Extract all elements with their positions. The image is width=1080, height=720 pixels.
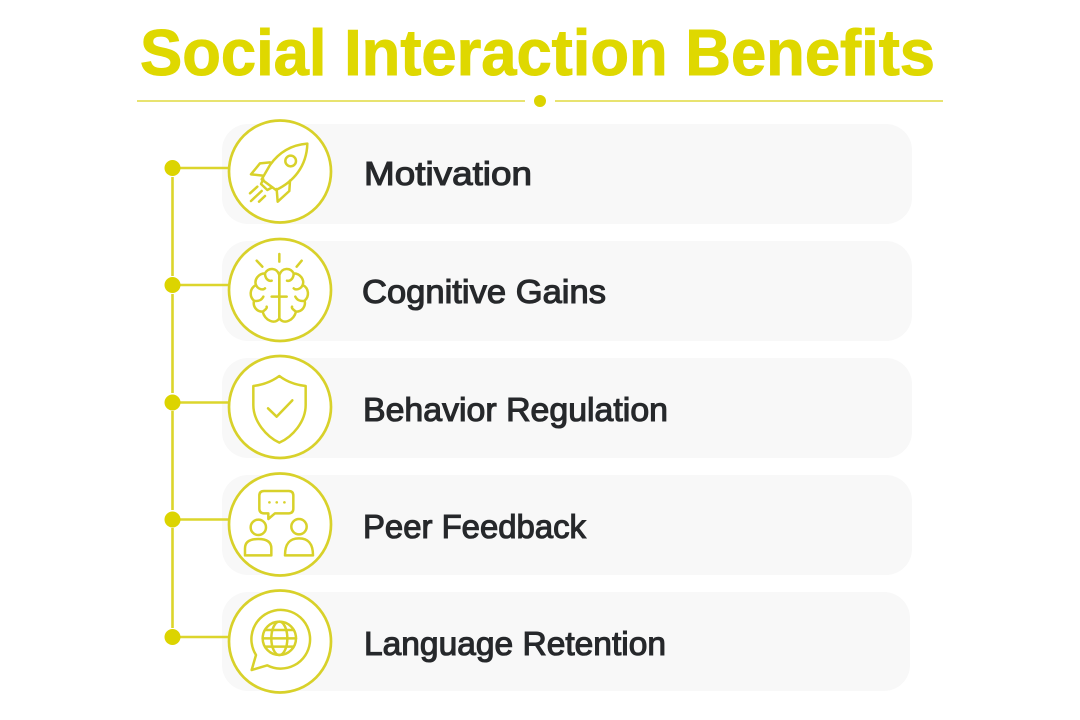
icon: globe in speech bubble [229, 590, 331, 692]
label: language retention: Language Retention [364, 625, 666, 662]
timeline connector [164, 160, 228, 645]
panel: language retention [222, 590, 910, 692]
icon: peers with speech bubble [229, 474, 331, 576]
label: peer feedback: Peer Feedback [363, 508, 586, 545]
title: Social Interaction Benefits [140, 16, 935, 89]
icon: rocket [229, 120, 331, 222]
panel: cognitive gains [222, 239, 912, 341]
panel: behavior regulation [222, 356, 912, 458]
label: motivation: Motivation [364, 155, 532, 192]
panel: peer feedback [222, 474, 912, 576]
icon: shield [229, 356, 331, 458]
label: behavior regulation: Behavior Regulation [363, 391, 668, 428]
title divider [137, 95, 943, 107]
panel: motivation [222, 120, 912, 224]
label: cognitive gains: Cognitive Gains [362, 273, 606, 310]
icon: brain [229, 239, 331, 341]
